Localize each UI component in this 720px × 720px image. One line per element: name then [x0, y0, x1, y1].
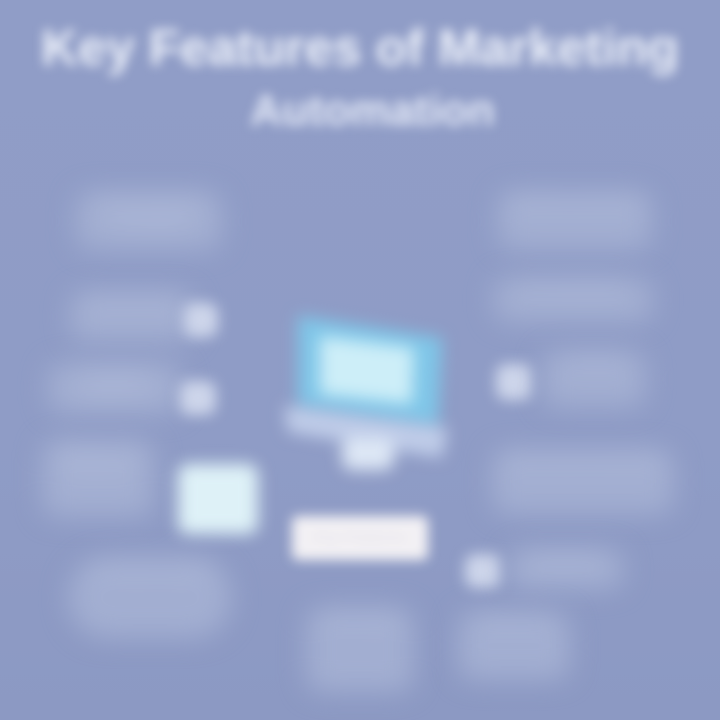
text block: bottom right: CRM Sync	[478, 613, 550, 630]
text block: left 3	[48, 363, 182, 413]
icon: right 5	[465, 554, 501, 588]
text block: left 1	[76, 192, 222, 250]
button: centre label: Key Features	[313, 529, 407, 546]
text block: right 5	[508, 549, 624, 589]
title: Key Features of Marketing	[41, 19, 679, 76]
icon: left 2	[184, 303, 218, 337]
text block: bottom centre: A/B Testing	[322, 609, 398, 626]
text block: right 2	[493, 278, 653, 322]
text block: left 1: Email Marketing Campaigns	[95, 193, 203, 229]
text block: left 3: Customer Segments	[81, 364, 149, 400]
text block: right 1	[498, 192, 652, 250]
text block: right 2: Personalization	[522, 279, 624, 296]
text block: right 4	[492, 450, 674, 514]
text block: left 2	[70, 292, 194, 342]
text block: right 3: Scoring	[569, 352, 619, 369]
icon: left 4 panel	[178, 464, 258, 534]
text block: left 4: Analytics and Reporting	[53, 442, 143, 478]
monitor screen	[320, 336, 414, 404]
text block: left 2: Lead Nurturing	[82, 293, 182, 310]
monitor frame	[298, 316, 442, 424]
text block: right 1: Workflow Automation	[505, 193, 645, 210]
button: centre label	[292, 516, 428, 560]
icon: left 3	[180, 381, 216, 415]
keyboard base	[284, 406, 448, 458]
subtitle: Automation	[250, 86, 495, 135]
text block: bottom centre	[306, 608, 414, 692]
text block: bottom right	[458, 612, 570, 680]
text block: right 5: Integration	[531, 550, 601, 567]
stand	[342, 438, 394, 470]
text block: right 4: Multi-channel Marketing	[503, 451, 663, 468]
icon: right 3	[496, 364, 532, 400]
text block: right 3	[542, 351, 646, 407]
text block: left 5: Social Media Integration	[70, 559, 230, 576]
text block: left 4	[42, 441, 154, 517]
text block: left 5	[68, 558, 232, 638]
icon: computer monitor	[279, 312, 453, 480]
